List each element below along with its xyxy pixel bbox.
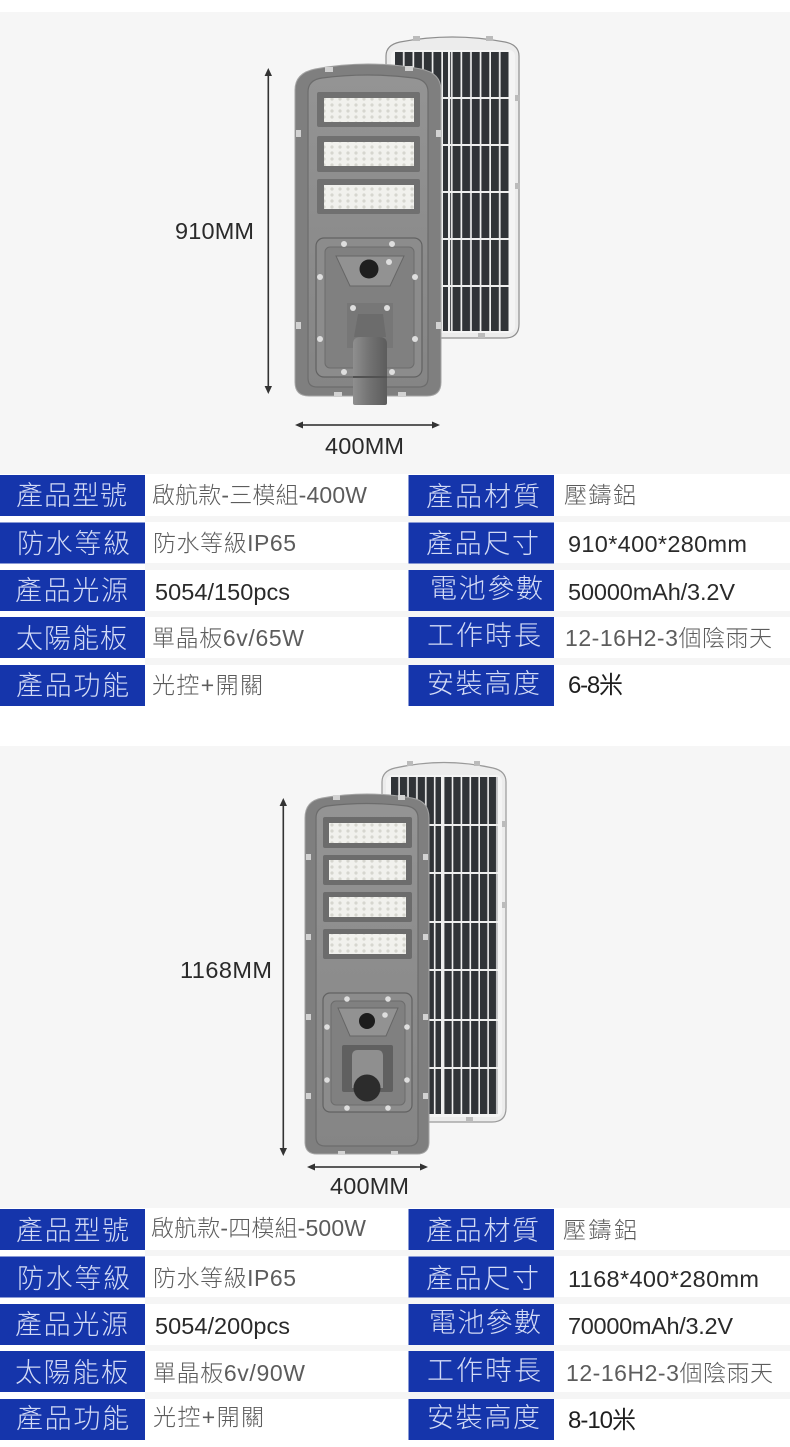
row: 太陽能板: 單晶板6v/65W: [152, 625, 304, 651]
row: 產品型號: [0, 475, 367, 516]
row: 產品材質: [408, 1209, 637, 1250]
row: 產品光源: [0, 1304, 290, 1345]
row: 產品尺寸: 1168*400*280mm: [568, 1266, 759, 1292]
row: 產品光源: 5054/150pcs: [155, 579, 290, 605]
icon: solar panel 400W: [386, 36, 520, 338]
row: 電池參數: 70000mAh/3.2V: [568, 1313, 733, 1339]
row: 產品尺寸: [408, 522, 747, 564]
row: 防水等級: [0, 522, 296, 564]
row: 工作時長: [408, 617, 772, 658]
panel: product image 400W: [0, 12, 790, 474]
row: 產品光源: 5054/200pcs: [155, 1313, 290, 1339]
label: 400MM: 400MM: [325, 433, 404, 459]
row: 產品功能: 光控+開關: [153, 1404, 264, 1430]
row: 太陽能板: 太陽能板: [16, 624, 127, 654]
row: 產品材質: 壓鑄鋁: [563, 1217, 637, 1243]
row: 太陽能板: [0, 617, 304, 658]
row: 防水等級: 防水等級IP65: [153, 530, 296, 556]
row: 工作時長: [408, 1351, 773, 1392]
row: 防水等級: 防水等級: [17, 529, 130, 559]
row: 太陽能板: 單晶板6v/90W: [153, 1360, 305, 1386]
row: 產品型號: 啟航款-四模組-500W: [151, 1215, 366, 1241]
row: 產品功能: 光控+開關: [152, 672, 263, 698]
row: 產品材質: 產品材質: [426, 1216, 539, 1246]
row: 工作時長: 12-16H2-3個陰雨天: [565, 625, 772, 651]
row: 產品功能: 產品功能: [16, 1404, 129, 1434]
row: 太陽能板: [0, 1351, 305, 1392]
icon: street lamp 400W: [295, 64, 441, 405]
row: 電池參數: [408, 1304, 733, 1345]
table: specs 500W: [0, 1209, 790, 1440]
arrow: width 400MM: [307, 1164, 428, 1170]
row: 產品光源: 產品光源: [15, 1310, 128, 1340]
row: 產品尺寸: 產品尺寸: [426, 529, 539, 559]
row: 產品型號: [0, 1209, 366, 1250]
row: 防水等級: 防水等級IP65: [153, 1265, 296, 1291]
table: specs 400W: [0, 475, 790, 706]
arrow: height 910MM: [265, 68, 272, 394]
arrow: width 400MM: [295, 422, 440, 428]
row: 產品光源: [0, 570, 290, 611]
row: 安裝高度: 8-10米: [568, 1407, 636, 1434]
row: 產品材質: 壓鑄鋁: [564, 482, 636, 508]
row: 產品型號: 產品型號: [16, 481, 127, 511]
row: 安裝高度: [408, 1399, 636, 1440]
row: 產品型號: 啟航款-三模組-400W: [152, 482, 367, 508]
row: 產品光源: 產品光源: [15, 576, 128, 606]
label: 910MM: 910MM: [175, 218, 254, 244]
row: 安裝高度: 安裝高度: [427, 1403, 540, 1433]
row: 產品功能: [0, 665, 263, 706]
row: 電池參數: [408, 570, 735, 611]
icon: solar panel 500W: [382, 761, 507, 1122]
row: 產品尺寸: 910*400*280mm: [568, 531, 747, 557]
row: 工作時長: 12-16H2-3個陰雨天: [566, 1360, 773, 1386]
row: 產品型號: 產品型號: [16, 1216, 129, 1246]
icon: street lamp 500W: [305, 794, 429, 1155]
row: 電池參數: 電池參數: [429, 1308, 541, 1338]
row: 產品材質: 產品材質: [426, 482, 540, 512]
row: 產品材質: [408, 475, 636, 516]
arrow: height 1168MM: [280, 798, 287, 1156]
row: 安裝高度: [408, 665, 623, 706]
row: 產品功能: 產品功能: [16, 671, 129, 701]
panel: product image 500W: [0, 746, 790, 1208]
row: 太陽能板: 太陽能板: [15, 1358, 128, 1388]
row: 防水等級: 防水等級: [17, 1264, 130, 1294]
row: 防水等級: [0, 1256, 296, 1298]
row: 產品尺寸: [408, 1256, 759, 1298]
row: 電池參數: 50000mAh/3.2V: [568, 579, 735, 605]
row: 安裝高度: 6-8米: [568, 672, 623, 699]
row: 電池參數: 電池參數: [430, 574, 543, 604]
row: 安裝高度: 安裝高度: [427, 669, 540, 699]
row: 產品尺寸: 產品尺寸: [426, 1264, 539, 1294]
label: 400MM: 400MM: [330, 1173, 409, 1199]
row: 產品功能: [0, 1399, 264, 1440]
row: 工作時長: 工作時長: [427, 1356, 541, 1386]
label: 1168MM: 1168MM: [180, 957, 272, 983]
row: 工作時長: 工作時長: [427, 621, 541, 651]
